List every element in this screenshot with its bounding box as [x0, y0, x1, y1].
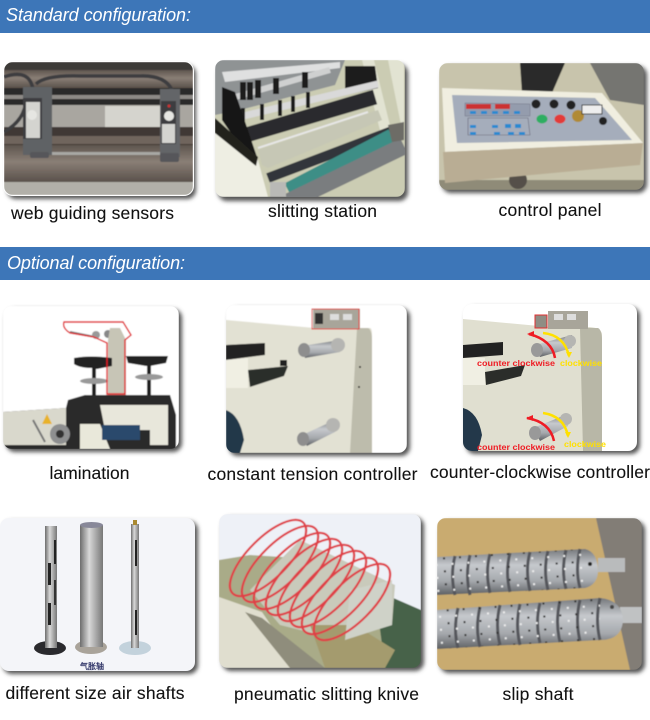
- panel: lamination: [3, 306, 182, 452]
- panel: air shafts: [0, 518, 198, 674]
- photo: pneumatic knife: [219, 509, 421, 668]
- panel: control panel: [439, 63, 647, 193]
- photo: air shafts: 气胀轴: [79, 661, 104, 671]
- header: standard configuration: [0, 0, 650, 33]
- photo: control panel: [439, 63, 644, 190]
- arrow labels: counter clockwise: [477, 443, 556, 452]
- photo: air shafts: [0, 518, 195, 671]
- caption: slip shaft: slip shaft: [502, 684, 574, 704]
- caption: slitting station: slitting station: [268, 201, 377, 221]
- photo: sensors on rollers: [4, 62, 193, 195]
- photo: counter-clockwise: [463, 304, 637, 452]
- caption: web guiding sensors: web guiding sensors: [10, 203, 174, 223]
- control face: [452, 95, 632, 143]
- caption: air shafts: different size air shafts: [6, 683, 185, 703]
- header: standard configuration: Standard configuration:: [6, 5, 191, 25]
- panel box: [442, 88, 643, 152]
- header: optional configuration: Optional configuration:: [7, 253, 185, 273]
- arrow labels: counter clockwise: [477, 359, 556, 368]
- arrow labels: [477, 359, 607, 452]
- panel: pneumatic slitting knive: [219, 509, 424, 671]
- photo: lamination: [3, 306, 179, 449]
- caption: counter-clockwise controller: counter-clockwise controller: [430, 462, 650, 482]
- panel: slip shaft: [437, 518, 645, 673]
- photo: constant tension: [226, 305, 407, 453]
- panel: counter-clockwise controller: [463, 304, 640, 454]
- arrow labels: clockwise: [560, 359, 603, 368]
- panel: constant tension controller: [226, 305, 410, 456]
- panel: web guiding sensors: [3, 61, 196, 199]
- caption: lamination: lamination: [50, 463, 130, 483]
- arrow labels: clockwise: [564, 440, 607, 449]
- photo: slitting station: [215, 60, 405, 202]
- photo: slip shaft: [437, 518, 642, 670]
- header: optional configuration: [0, 247, 650, 280]
- panel: slitting station: [215, 60, 408, 202]
- caption: control panel: control panel: [498, 200, 602, 220]
- caption: constant tension controller: constant tension controller: [208, 464, 418, 484]
- caption: pneumatic slitting knive: pneumatic slitting knive: [234, 684, 419, 704]
